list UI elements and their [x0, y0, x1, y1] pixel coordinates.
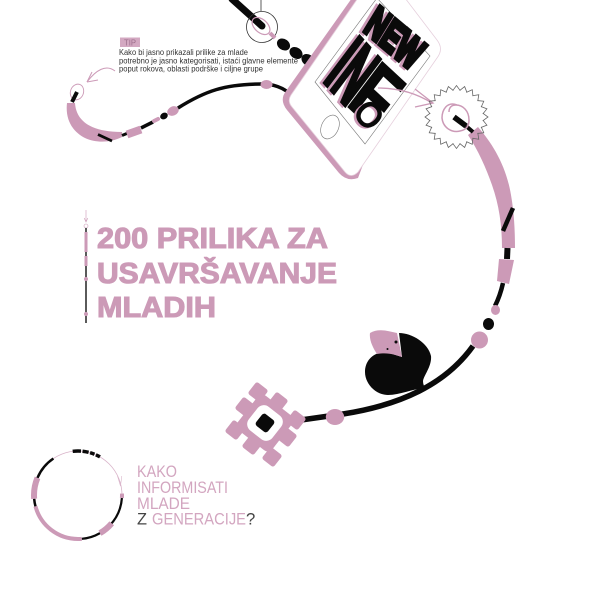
arrow: tip to left cord	[87, 68, 115, 82]
phone body	[283, 0, 440, 179]
arrow: phone to starburst	[378, 88, 433, 107]
subtitle: KAKO	[137, 462, 177, 481]
tip text: poput rokova, oblasti podrške i ciljne grupe	[119, 64, 263, 74]
phone headline: INFO: IN	[312, 21, 392, 122]
tip text: potrebno je jasno kategorisati, istaći glavne elemente	[119, 56, 298, 66]
tip label	[120, 38, 140, 48]
phone screen	[315, 0, 430, 144]
subtitle	[137, 462, 255, 528]
right cord	[301, 117, 515, 425]
subtitle: Z	[137, 510, 147, 528]
left cord from ring to phone	[67, 80, 292, 142]
heart-shaped blob	[365, 330, 431, 395]
phone headline: INFO: O	[346, 93, 391, 138]
phone headline: INFO: O	[343, 94, 388, 139]
main title: USAVRŠAVANJE	[97, 256, 337, 290]
subtitle: INFORMISATI	[137, 478, 228, 497]
subtitle: ?	[246, 510, 255, 528]
phone headline: INFO: IN	[309, 21, 389, 122]
tip label: TIP	[124, 38, 136, 48]
pink ring at cord start	[442, 104, 469, 131]
circular cord diagram	[34, 451, 122, 539]
main title: MLADIH	[97, 292, 216, 324]
tip text: Kako bi jasno prikazali prilike za mlade	[119, 48, 248, 57]
top cord with ring	[232, 0, 317, 69]
starburst	[425, 86, 488, 148]
flower-shaped endpoint	[224, 381, 307, 468]
circle arrowhead	[118, 476, 122, 486]
phone headline: INFO	[309, 21, 419, 145]
tip text	[119, 48, 298, 74]
phone headline: INFO: F	[334, 44, 419, 145]
phone home button	[317, 112, 343, 142]
main title: 200 PRILIKA ZA	[97, 223, 328, 255]
subtitle: MLADE	[137, 494, 190, 513]
main title divider line	[84, 210, 88, 323]
main title	[97, 223, 337, 324]
subtitle: GENERACIJE	[152, 510, 246, 528]
